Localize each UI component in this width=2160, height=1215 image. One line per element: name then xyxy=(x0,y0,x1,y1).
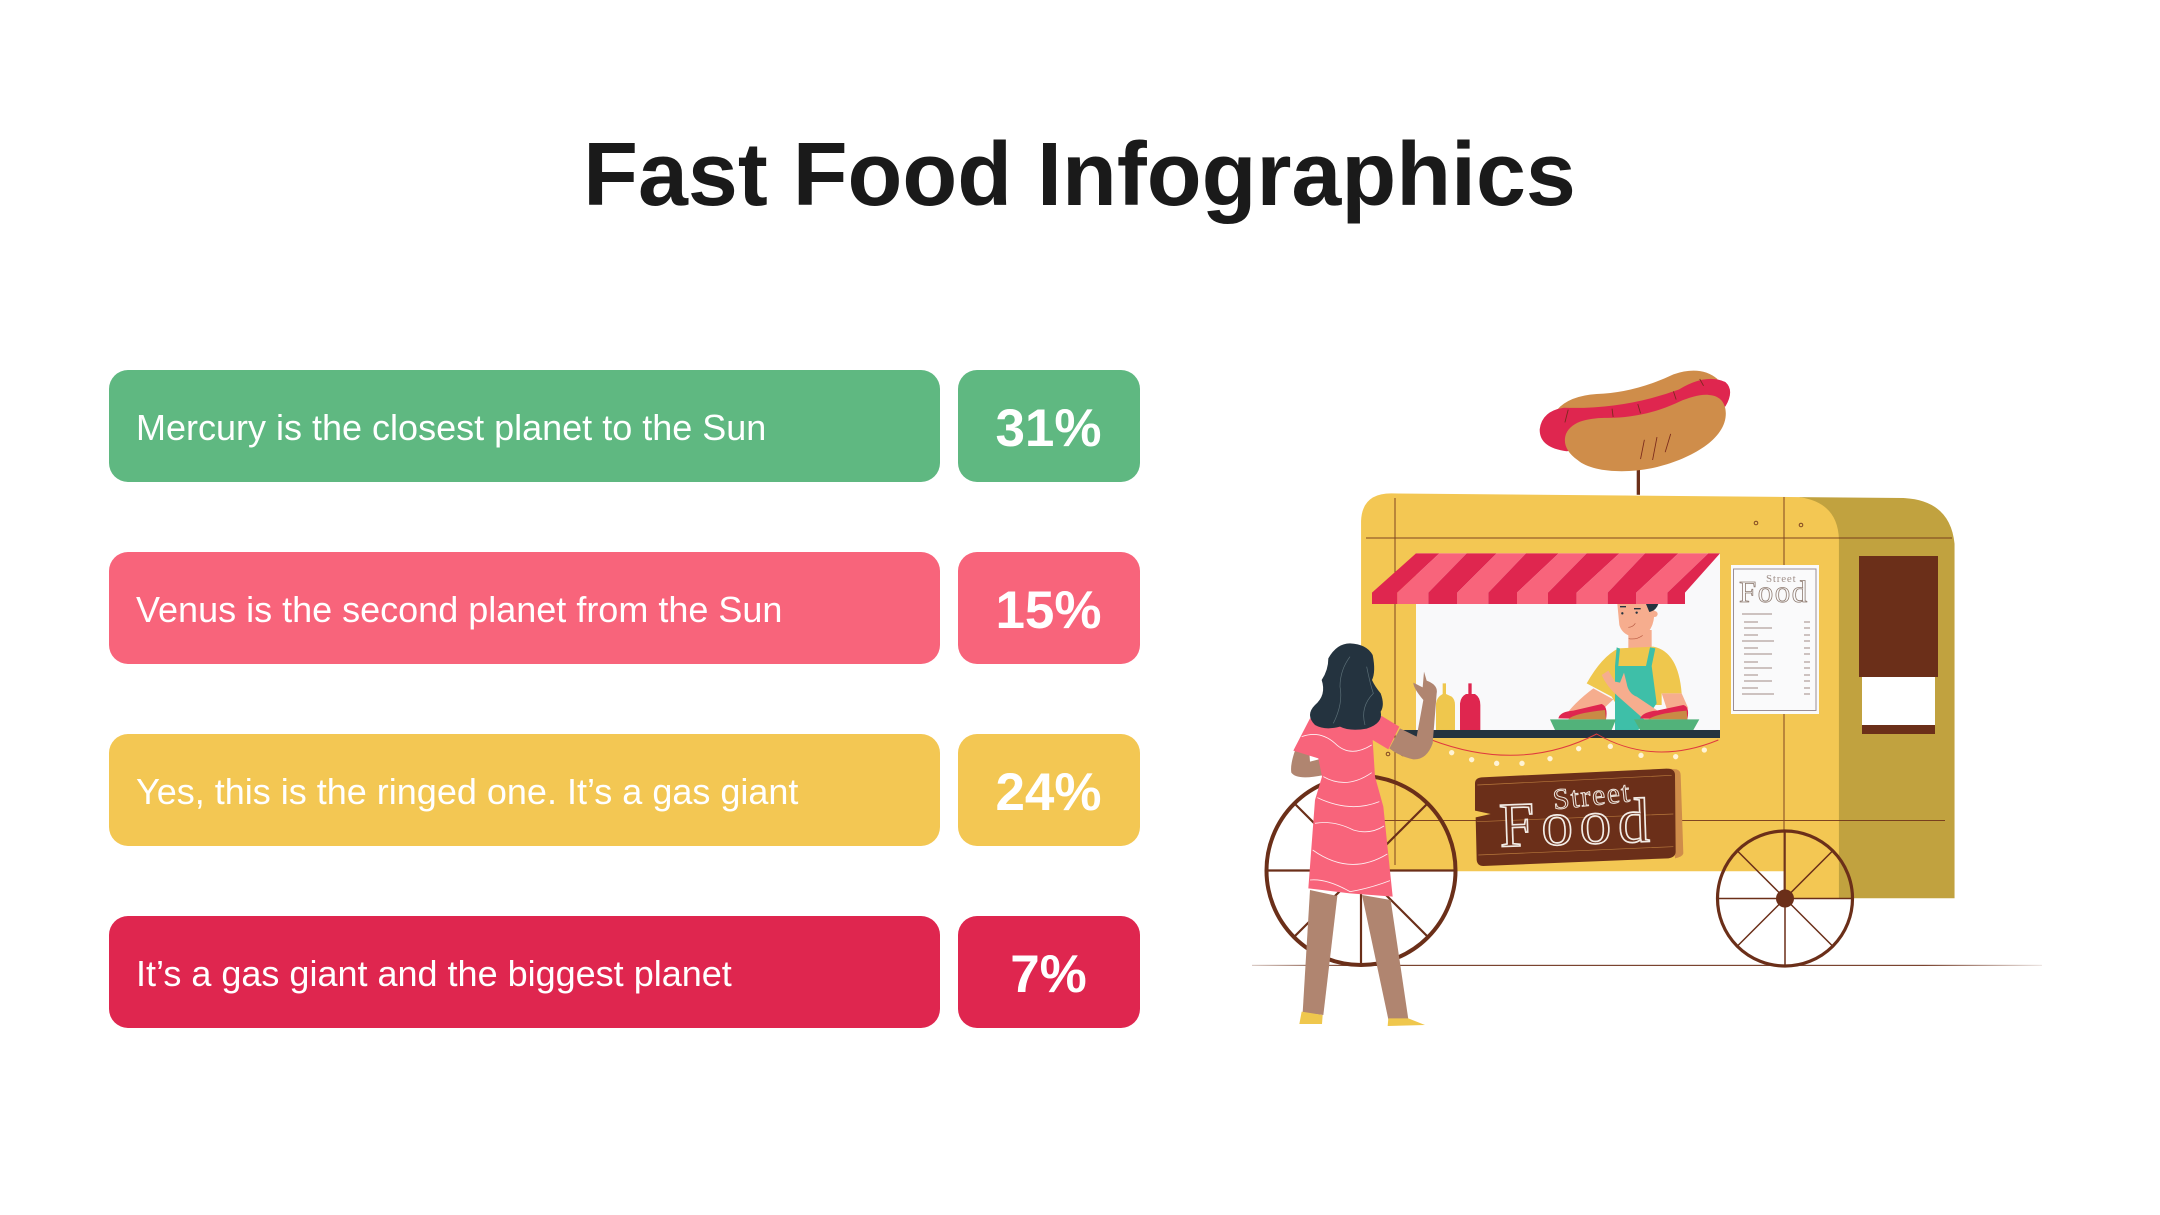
woman customer xyxy=(1291,643,1437,1026)
label bar: Mercury: Mercury is the closest planet to the Sun xyxy=(136,406,766,448)
row: Jupiter 7% xyxy=(109,916,1140,1028)
woman: left arm xyxy=(1291,751,1324,777)
label bar: Mercury xyxy=(109,370,940,482)
ground line xyxy=(1252,965,2042,966)
title: Fast Food Infographics xyxy=(583,125,1576,225)
percentage: 7%: 7% xyxy=(1010,945,1087,1004)
truck body xyxy=(1361,371,1955,898)
row: Saturn 24% xyxy=(109,734,1140,846)
awning xyxy=(1372,553,1720,604)
row: Venus 15% xyxy=(109,552,1140,664)
percentage: 24% xyxy=(958,734,1140,846)
street food sign xyxy=(1475,769,1683,866)
label bar: Saturn: Yes, this is the ringed one. It’s a gas giant xyxy=(136,770,798,812)
row: Mercury 31% xyxy=(109,370,1140,482)
label bar: Jupiter xyxy=(109,916,940,1028)
sign text: Food: Food xyxy=(1498,785,1657,861)
label bar: Venus xyxy=(109,552,940,664)
truck front panel xyxy=(1361,493,1839,898)
sign text: Street: Street xyxy=(1551,776,1633,816)
serving window xyxy=(1416,553,1720,732)
woman: shoes xyxy=(1299,1012,1425,1026)
menu heading: Street xyxy=(1766,573,1796,585)
counter xyxy=(1403,730,1720,738)
percentage: 24%: 24% xyxy=(995,763,1102,822)
percentage: 7% xyxy=(958,916,1140,1028)
woman: raised arm xyxy=(1389,672,1437,759)
hot dog tray: right xyxy=(1634,705,1699,730)
woman: dress xyxy=(1293,716,1399,897)
woman: legs xyxy=(1303,890,1408,1019)
percentage: 15% xyxy=(958,552,1140,664)
hot dog sign xyxy=(1540,371,1730,471)
wheel: right xyxy=(1717,830,1853,966)
serving window scene xyxy=(1372,553,1720,866)
side panel door xyxy=(1859,556,1938,734)
wheel: left xyxy=(1266,776,1456,965)
menu heading food: Food xyxy=(1739,574,1809,609)
menu rows xyxy=(1742,614,1810,694)
truck side panel xyxy=(1799,497,1955,898)
woman: hair xyxy=(1310,643,1383,730)
percentage: 31% xyxy=(958,370,1140,482)
menu board xyxy=(1731,565,1819,714)
vendor xyxy=(1563,604,1688,730)
mustard bottle xyxy=(1436,683,1455,730)
percentage: 31%: 31% xyxy=(995,399,1102,458)
truck panel seams xyxy=(1366,497,1952,897)
label bar: Jupiter: It’s a gas giant and the biggest planet xyxy=(136,952,732,994)
label bar: Saturn xyxy=(109,734,940,846)
ketchup bottle xyxy=(1460,683,1480,730)
label bar: Venus: Venus is the second planet from the Sun xyxy=(136,588,782,630)
hot dog sign pole xyxy=(1637,468,1640,495)
hot dog tray: left xyxy=(1550,704,1616,730)
percentage: 15%: 15% xyxy=(995,581,1102,640)
string lights xyxy=(1432,734,1718,766)
